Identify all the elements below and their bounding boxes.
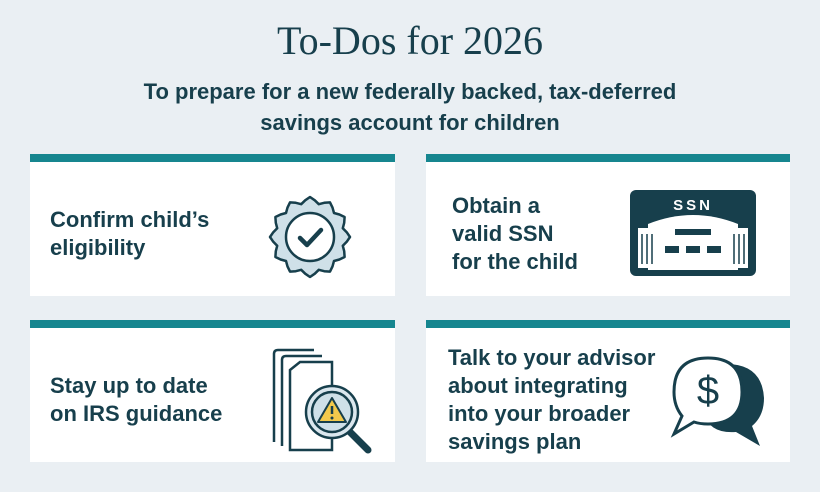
text: SSN: valid SSN bbox=[452, 221, 553, 246]
icon: speech bubbles dollar: $ bbox=[697, 369, 719, 413]
text: advisor: into your broader bbox=[448, 401, 630, 426]
text: advisor: savings plan bbox=[448, 429, 581, 454]
panel: SSN bbox=[426, 154, 790, 296]
text: IRS bbox=[50, 373, 222, 426]
icon: badge check bbox=[268, 196, 352, 278]
panel: eligibility bbox=[30, 154, 395, 296]
text: advisor bbox=[448, 345, 656, 454]
text: advisor: about integrating bbox=[448, 373, 628, 398]
panel: advisor bbox=[426, 320, 790, 462]
text: IRS: on IRS guidance bbox=[50, 401, 222, 426]
icon: SSN card: SSN bbox=[673, 197, 713, 214]
text: IRS: Stay up to date bbox=[50, 373, 208, 398]
title: To-Dos for 2026 bbox=[277, 18, 543, 63]
text: SSN: Obtain a bbox=[452, 193, 540, 218]
icon: documents magnifier bbox=[272, 348, 372, 454]
icon: SSN card bbox=[630, 190, 756, 276]
icon: speech bubbles dollar bbox=[670, 356, 764, 446]
text: SSN: for the child bbox=[452, 249, 578, 274]
text: eligibility bbox=[50, 207, 209, 260]
subtitle: savings account for children bbox=[260, 110, 560, 135]
text: eligibility: Confirm child’s bbox=[50, 207, 209, 232]
panel: IRS guidance bbox=[30, 320, 395, 462]
text: advisor: Talk to your advisor bbox=[448, 345, 655, 370]
text: eligibility: eligibility bbox=[50, 235, 145, 260]
text: SSN bbox=[452, 193, 578, 274]
subtitle bbox=[144, 79, 676, 135]
subtitle: To prepare for a new federally backed, tax-deferred bbox=[144, 79, 676, 104]
